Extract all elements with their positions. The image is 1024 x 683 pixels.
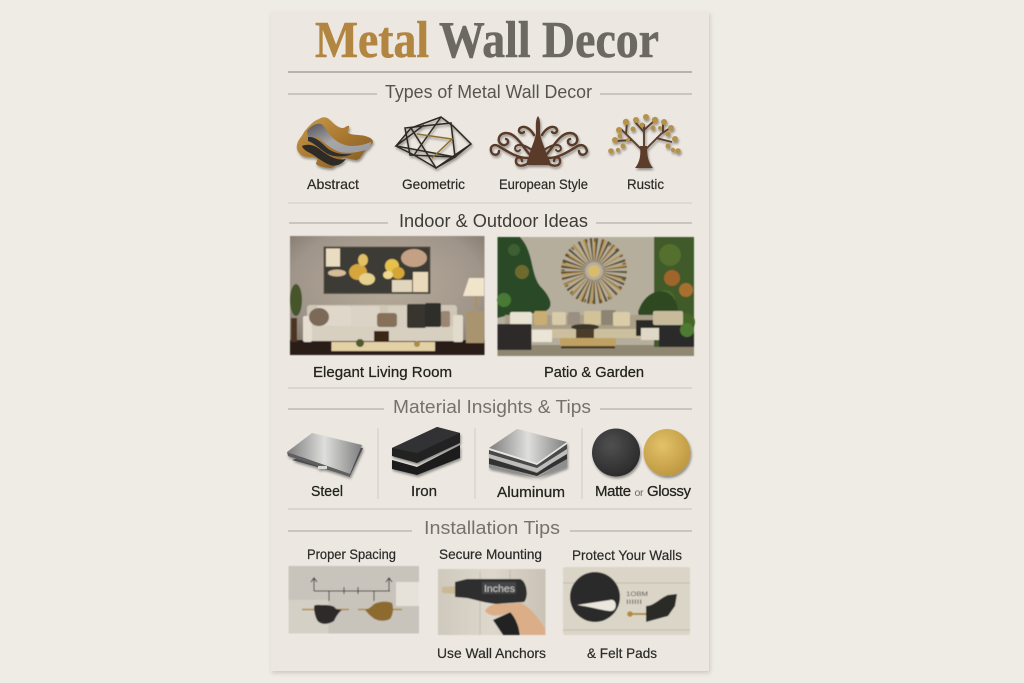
label: steel: Steel bbox=[311, 483, 343, 500]
icon: glossy gold disc bbox=[644, 429, 690, 476]
panel: types of metal wall decor bbox=[288, 82, 692, 192]
image: felt pad and bracket: 1OBM bbox=[626, 591, 648, 598]
icon: matte black disc bbox=[592, 428, 640, 476]
icon: iron blocks bbox=[392, 427, 460, 475]
panel: material insights and tips bbox=[287, 397, 692, 501]
icon: european style bbox=[491, 116, 587, 166]
label: rustic: Rustic bbox=[627, 176, 664, 192]
icon: rustic tree bbox=[608, 114, 681, 168]
heading: material insights: Material Insights & Tips bbox=[393, 397, 591, 417]
label: geometric: Geometric bbox=[402, 176, 465, 192]
title: Wall Decor bbox=[439, 12, 659, 69]
heading: installation tips: Installation Tips bbox=[424, 518, 560, 538]
photo: elegant living room bbox=[290, 236, 484, 355]
label: secure mounting: Secure Mounting bbox=[439, 546, 542, 562]
title: Metal bbox=[315, 12, 429, 69]
panel: installation tips bbox=[288, 518, 692, 661]
image: proper spacing diagram bbox=[288, 566, 419, 634]
image: drill in hand bbox=[438, 569, 546, 635]
label: proper spacing: Proper Spacing bbox=[307, 546, 396, 562]
icon: geometric bbox=[396, 117, 471, 168]
label: felt pads: & Felt Pads bbox=[587, 645, 657, 661]
label: iron: Iron bbox=[411, 483, 437, 500]
photo: patio and garden bbox=[497, 237, 695, 356]
heading: types: Types of Metal Wall Decor bbox=[385, 82, 592, 102]
label: european style: European Style bbox=[499, 176, 588, 192]
label: use wall anchors: Use Wall Anchors bbox=[437, 645, 546, 661]
heading: indoor and outdoor: Indoor & Outdoor Ideas bbox=[399, 211, 588, 231]
image: felt pad and bracket bbox=[563, 567, 690, 635]
image: drill in hand: Inches bbox=[484, 584, 515, 595]
caption: elegant living room: Elegant Living Room bbox=[313, 364, 452, 381]
poster panel bbox=[271, 12, 709, 671]
label: matte or glossy: Matte or Glossy bbox=[595, 483, 692, 500]
caption: patio and garden: Patio & Garden bbox=[544, 364, 644, 381]
icon: aluminum stack bbox=[489, 429, 567, 478]
title bbox=[315, 12, 659, 69]
icon: abstract bbox=[297, 117, 373, 168]
label: abstract: Abstract bbox=[307, 176, 359, 192]
label: protect your walls: Protect Your Walls bbox=[572, 547, 682, 563]
panel: indoor and outdoor ideas bbox=[289, 211, 695, 381]
label: aluminum: Aluminum bbox=[497, 484, 565, 501]
image: felt pad and bracket: IIIIII bbox=[626, 600, 643, 606]
icon: steel sheet bbox=[287, 433, 363, 477]
